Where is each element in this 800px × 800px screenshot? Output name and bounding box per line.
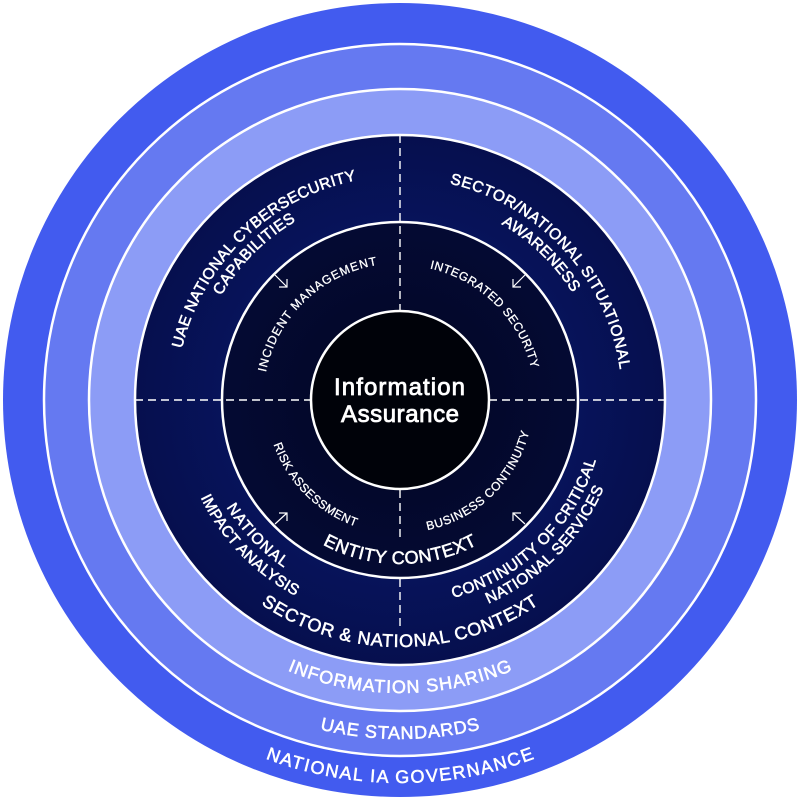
label: Continuity of Critical National Services: NATIONAL SERVICES [484,485,603,604]
arrow: top left [275,275,287,287]
label: Incident Management: INCIDENT MANAGEMENT [258,256,376,372]
core: Information Assurance [311,311,489,489]
label: Sector and National Context: SECTOR & NATIONAL CONTEXT [262,594,536,648]
core title: Assurance [341,401,459,428]
label: Integrated Security: INTEGRATED SECURITY [430,260,540,366]
arrow: top right [513,275,525,287]
label: UAE National Cybersecurity Capabilities: CAPABILITIES [214,213,294,294]
label: Entity Context: ENTITY CONTEXT [324,533,474,564]
label: Information Sharing: INFORMATION SHARING [288,659,511,694]
core title: Information [334,374,465,401]
arrow: bottom left [275,513,287,524]
label: Sector/National Situational Awareness: SECTOR/NATIONAL SITUATIONAL [450,174,630,370]
label: National Impact Analysis: NATIONAL [226,502,286,568]
arrow: bottom right [513,513,525,524]
label: UAE Standards: UAE STANDARDS [322,717,479,740]
label: Continuity of Critical National Services: CONTINUITY OF CRITICAL [452,460,596,597]
label: National Impact Analysis: IMPACT ANALYSIS [200,494,300,595]
ring: Entity Context [220,220,580,580]
core title [334,374,465,428]
label: Risk Assessment: RISK ASSESSMENT [274,442,358,526]
arrows pointing inward [275,275,525,524]
label: National IA Governance: NATIONAL IA GOVERNANCE [266,747,534,784]
label: Business Continuity: BUSINESS CONTINUITY [426,430,528,530]
ring: Sector and National Context [134,134,666,666]
label: UAE National Cybersecurity Capabilities: UAE NATIONAL CYBERSECURITY [172,170,354,347]
label: Sector/National Situational Awareness: AWARENESS [500,216,580,292]
quadrant dividers [135,135,665,627]
